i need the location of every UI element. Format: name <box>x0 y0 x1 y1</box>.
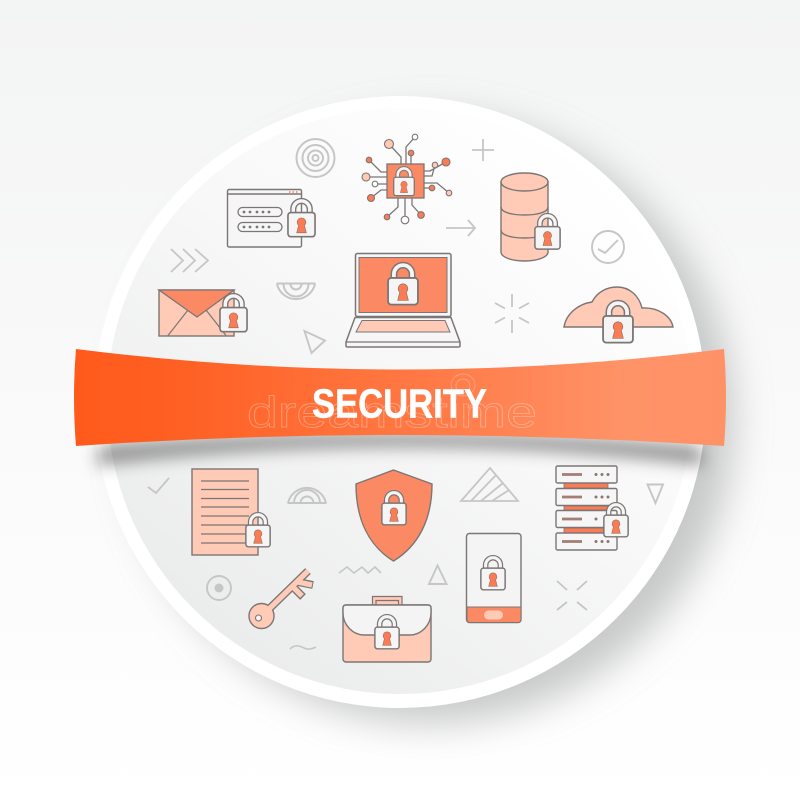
icon: sparkle burst <box>495 294 529 333</box>
ribbon banner <box>74 349 726 446</box>
title: SECURITY <box>312 380 487 426</box>
icon: triangle down <box>648 484 663 503</box>
icon: cloud with lock <box>564 287 673 343</box>
watermark logo rings <box>451 374 475 396</box>
icon: zigzag <box>339 567 381 573</box>
icon: hatched triangle <box>461 468 518 501</box>
icon: triangle outline small <box>429 566 446 584</box>
icon: wave <box>290 646 316 649</box>
icon: database with lock <box>501 173 560 261</box>
icon: target rings <box>296 139 334 177</box>
icon: laptop with lock <box>346 254 460 347</box>
icon: arrow <box>446 220 475 236</box>
circle drop shadow <box>126 116 734 724</box>
icon: document with lock <box>192 469 270 555</box>
ribbon shadow <box>96 433 704 466</box>
icon: small check <box>148 478 169 493</box>
icon: triangle outline <box>304 331 325 353</box>
inner gradient disc <box>107 108 693 694</box>
icon: x burst <box>557 581 587 610</box>
icon: briefcase with lock <box>343 596 431 662</box>
icon: key <box>249 571 313 628</box>
icon: check circle <box>592 231 624 263</box>
icon: half rings down <box>276 284 316 299</box>
icon: password window with lock <box>228 190 315 247</box>
icon: envelope with lock <box>159 290 247 336</box>
watermark: dreamstime <box>247 388 537 437</box>
icon: plus <box>472 139 494 161</box>
icon: shield with lock <box>356 470 432 561</box>
icon: half rings up <box>288 488 326 503</box>
icon: chevrons <box>171 249 208 272</box>
outer white ring <box>94 96 706 708</box>
icon: server rack with lock <box>556 466 628 550</box>
icon: circuit chip with lock <box>362 134 452 224</box>
icon: smartphone with lock <box>466 534 521 622</box>
icon: dotted circle <box>207 576 231 600</box>
